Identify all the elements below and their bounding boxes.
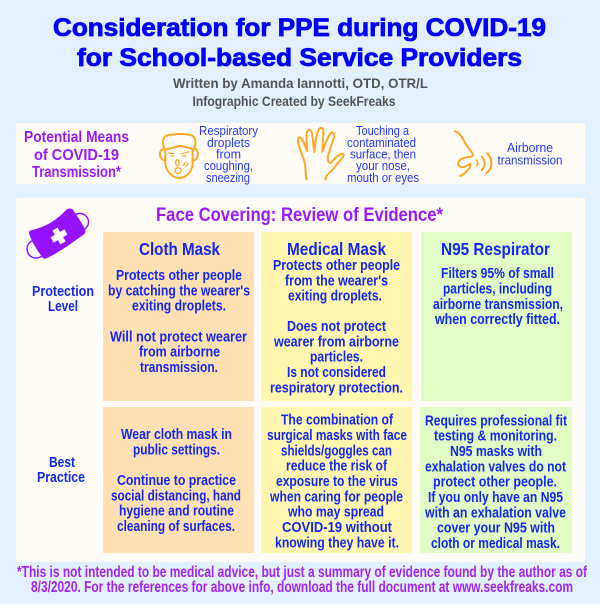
icon: coughing face (160, 134, 198, 178)
medical mask practice text: COVID-19 without (282, 520, 392, 536)
cloth mask practice text: public settings. (133, 442, 220, 458)
droplets caption: droplets (207, 135, 250, 150)
medical mask protection text: Is not considered (287, 365, 386, 381)
medical mask practice text (267, 413, 407, 551)
n95 protection text: Filters 95% of small (441, 266, 554, 282)
surface caption: your nose, (356, 158, 410, 173)
n95 practice text: protect other people. (433, 475, 557, 491)
icon: mask with cross (27, 208, 88, 259)
row label: protection level: Protection (32, 284, 94, 300)
transmission heading (24, 129, 129, 181)
medical mask practice text: The combination of (281, 413, 393, 429)
medical mask practice text: shields/goggles can (281, 443, 392, 459)
medical mask protection text: Protects other people (273, 258, 400, 274)
n95 practice text: cloth or medical mask. (431, 536, 560, 552)
cloth mask protection text: transmission. (140, 360, 218, 376)
surface caption: contaminated (347, 135, 416, 150)
surface caption (347, 123, 419, 185)
airborne caption: Airborne (507, 140, 553, 155)
medical mask practice text: reduce the risk of (286, 459, 387, 475)
row label: best practice: Practice (37, 470, 85, 486)
cloth mask practice text: social distancing, hand (111, 488, 241, 504)
droplets caption (199, 123, 258, 185)
row label: best practice: Best (49, 455, 75, 471)
cloth mask protection text (108, 268, 250, 376)
cell: n95 protection (421, 232, 572, 401)
n95 practice text: If you only have an N95 (428, 490, 563, 506)
medical mask protection text: respiratory protection. (270, 380, 403, 396)
cloth mask practice text: Continue to practice (117, 473, 236, 489)
transmission heading: Transmission* (32, 164, 122, 181)
panel: transmission (16, 123, 585, 185)
cloth mask heading: Cloth Mask (139, 239, 220, 259)
medical mask protection text: exiting droplets. (288, 289, 382, 305)
evidence heading: Face Covering: Review of Evidence* (156, 205, 444, 226)
cloth mask protection text: by catching the wearer's (108, 283, 250, 299)
droplets caption: sneezing (206, 170, 250, 185)
medical mask protection text: from the wearer's (285, 273, 388, 289)
n95 practice text (424, 413, 567, 552)
byline (173, 75, 428, 109)
title: Consideration for PPE during COVID-19 (53, 14, 546, 42)
droplets caption: Respiratory (199, 123, 258, 138)
cloth mask protection text: exiting droplets. (132, 299, 226, 315)
cloth mask protection text: Will not protect wearer (110, 329, 247, 345)
byline: Written by Amanda Iannotti, OTD, OTR/L (173, 75, 428, 91)
n95 protection text: particles, including (443, 282, 552, 298)
cell: cloth mask best practice (103, 407, 254, 553)
cell: medical mask best practice (261, 407, 412, 553)
cell: cloth mask protection (103, 232, 254, 401)
cloth mask practice text: Wear cloth mask in (121, 427, 232, 443)
cell: medical mask protection (261, 232, 412, 401)
medical mask protection text: wearer from airborne (273, 334, 399, 350)
medical mask practice text: who may spread (287, 505, 384, 521)
row label: protection level: Level (48, 299, 78, 315)
n95 heading: N95 Respirator (441, 239, 550, 259)
cloth mask practice text: hygiene and routine (119, 504, 234, 520)
surface caption: Touching a (356, 123, 410, 138)
medical mask protection text (270, 258, 403, 396)
cloth mask protection text: Protects other people (116, 268, 242, 284)
n95 practice text: cover your N95 with (437, 521, 555, 537)
cloth mask practice text: cleaning of surfaces. (117, 519, 235, 535)
cloth mask protection text: from airborne (139, 345, 220, 361)
airborne caption: transmission (498, 152, 562, 168)
cell: n95 best practice (420, 407, 572, 553)
n95 practice text: Requires professional fit (425, 413, 567, 429)
footer disclaimer (17, 564, 588, 596)
icon: hand (298, 128, 344, 179)
medical mask heading: Medical Mask (287, 239, 386, 259)
medical mask practice text: knowing they have it. (275, 535, 399, 551)
medical mask protection text: Does not protect (287, 319, 386, 335)
n95 practice text: testing & monitoring. (434, 429, 557, 445)
medical mask practice text: when caring for people (269, 489, 403, 505)
n95 protection text: airborne transmission, (433, 297, 563, 313)
medical mask practice text: exposure to the virus (276, 474, 398, 490)
droplets caption: coughing, (204, 158, 253, 173)
medical mask practice text: surgical masks with face (267, 428, 407, 444)
title: for School-based Service Providers (77, 44, 522, 72)
n95 practice text: with an exhalation valve (424, 505, 566, 521)
title (53, 14, 546, 72)
n95 protection text (433, 266, 563, 328)
row label: best practice (37, 455, 85, 486)
surface caption: surface, then (350, 146, 416, 162)
surface caption: mouth or eyes (347, 170, 419, 185)
n95 protection text: when correctly fitted. (434, 312, 560, 328)
cloth mask practice text (111, 427, 241, 535)
icon: nose and airflow (455, 131, 491, 176)
medical mask protection text: particles. (310, 350, 363, 366)
row label: protection level (32, 284, 94, 315)
byline: Infographic Created by SeekFreaks (192, 93, 396, 109)
transmission heading: of COVID-19 (34, 147, 119, 164)
n95 practice text: N95 masks with (450, 444, 542, 460)
n95 practice text: exhalation valves do not (425, 459, 566, 475)
airborne caption (498, 140, 562, 168)
droplets caption: from (216, 146, 241, 162)
transmission heading: Potential Means (24, 129, 129, 146)
panel: face covering evidence (16, 198, 585, 562)
